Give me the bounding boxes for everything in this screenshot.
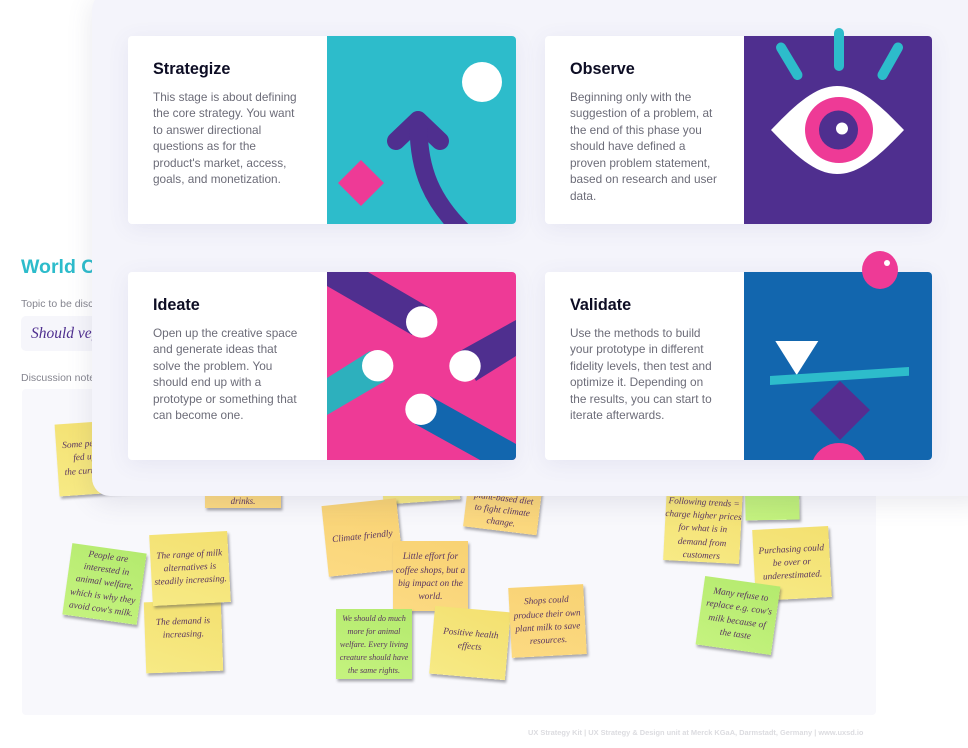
- note: many refuse: Many refuse to: [713, 586, 769, 604]
- note: animal welfare: more for animal: [348, 626, 400, 636]
- note: animal welfare: creature should have: [340, 652, 408, 662]
- note: people are interested: which is why they: [69, 587, 136, 606]
- note: some people: fed up with: [73, 451, 115, 464]
- note: range of milk: [149, 531, 231, 606]
- label: discussion notes: Discussion notes: [21, 372, 100, 384]
- note: purchasing: Purchasing could: [758, 543, 824, 556]
- note: people are interested: avoid cow's milk.: [68, 600, 133, 619]
- note: drinks: [205, 440, 281, 508]
- text: observe: should have defined a: [570, 139, 685, 153]
- note: little effort: [393, 541, 468, 611]
- note: following trends: charge higher prices: [665, 508, 742, 522]
- note: animal welfare: We should do much: [342, 614, 406, 622]
- heading: strategize: Strategize: [153, 60, 230, 78]
- text: ideate: can become one.: [153, 408, 244, 422]
- card: strategize: [128, 36, 516, 224]
- note: shops could produce: produce their own: [513, 607, 581, 620]
- text: ideate: and generate ideas that: [153, 342, 277, 356]
- illustration: connected circles: [327, 272, 516, 460]
- note: shops could produce: plant milk to save: [515, 620, 581, 634]
- note: green hidden: [744, 450, 800, 520]
- text: ideate: [153, 326, 297, 422]
- text: validate: Use the methods to build: [570, 326, 700, 340]
- input: topic: [21, 316, 221, 351]
- text: observe: [570, 90, 717, 203]
- note: some people: Some people are: [62, 437, 124, 451]
- note: range of milk: steadily increasing.: [154, 574, 227, 588]
- label: topic: Topic to be discussed: [21, 298, 121, 310]
- text: validate: the results, you can start to: [570, 392, 712, 406]
- note: animal welfare: the same rights.: [348, 666, 400, 674]
- text: validate: optimize it. Depending on: [570, 375, 703, 389]
- note: many refuse: milk because of: [708, 612, 767, 630]
- heading: observe: Observe: [570, 60, 635, 78]
- text: ideate: prototype or something that: [153, 392, 297, 406]
- note: range of milk: alternatives is: [164, 561, 216, 574]
- note: shops could produce: Shops could: [524, 594, 569, 607]
- note: range of milk: The range of milk: [156, 548, 222, 561]
- note: people are interested: animal welfare,: [75, 574, 134, 592]
- footer credit: UX Strategy Kit | UX Strategy & Design unit at Merck KGaA, Darmstadt, Germany | www.uxsd.io: [528, 728, 863, 737]
- note: purchasing: underestimated.: [763, 570, 823, 583]
- text: observe: the end of this phase you: [570, 123, 702, 137]
- note: many refuse: [696, 576, 780, 655]
- text: strategize: goals, and monetization.: [153, 172, 281, 186]
- note: demand is increasing: The demand is: [156, 616, 210, 628]
- text: strategize: [153, 90, 297, 186]
- note: climate friendly: [321, 498, 404, 577]
- note: climate friendly: Climate friendly: [332, 529, 393, 545]
- note: animal welfare: welfare. Every living: [340, 640, 408, 648]
- note: purchasing: [752, 526, 832, 601]
- note: many refuse: the taste: [719, 627, 751, 642]
- note: animal welfare: [336, 609, 412, 679]
- panel: sticky note board: [22, 389, 876, 715]
- text: ideate: solve the problem. You: [153, 359, 272, 373]
- note: little effort: world.: [418, 592, 442, 602]
- text: strategize: questions as for the: [153, 139, 256, 153]
- illustration: arrow: [327, 36, 516, 224]
- note: people are interested: [62, 543, 147, 625]
- text: validate: [570, 326, 712, 422]
- text: ideate: should end up with a: [153, 375, 261, 389]
- card: ideate: [128, 272, 516, 460]
- note: yellow hidden: [379, 429, 460, 505]
- text: strategize: to answer directional: [153, 123, 261, 137]
- text: strategize: product's market, access,: [153, 156, 286, 170]
- note: following trends: demand from: [678, 535, 727, 548]
- heading: validate: Validate: [570, 296, 631, 314]
- note: demand is increasing: increasing.: [163, 630, 204, 641]
- text: observe: suggestion of a problem, at: [570, 106, 712, 120]
- note: shops could produce: [508, 584, 587, 658]
- note: plant-based diet: change.: [486, 515, 516, 529]
- note: positive health effects: Positive health: [443, 627, 499, 641]
- text: validate: fidelity levels, then test and: [570, 359, 712, 373]
- text: observe: based on research and user: [570, 172, 717, 186]
- note: drinks: drinks.: [231, 496, 255, 506]
- note: following trends: [663, 486, 743, 564]
- card: validate: [545, 272, 932, 460]
- heading: ideate: Ideate: [153, 296, 200, 314]
- note: people are interested: People are: [88, 549, 129, 565]
- note: some people: [55, 420, 133, 496]
- note: little effort: coffee shops, but a: [396, 566, 465, 576]
- note: positive health effects: [429, 606, 511, 680]
- note: purchasing: be over or: [773, 557, 811, 569]
- text: observe: Beginning only with the: [570, 90, 691, 104]
- illustration: eye: [744, 28, 932, 224]
- text: validate: iterate afterwards.: [570, 408, 664, 422]
- note: demand is increasing: [144, 600, 223, 673]
- illustration: balance: [744, 251, 932, 460]
- input: topic: Should vegan milk be offered?: [31, 325, 219, 342]
- text: observe: proven problem statement,: [570, 156, 710, 170]
- note: many refuse: replace e.g. cow's: [706, 599, 772, 618]
- note: some people: the current offer: [64, 464, 125, 478]
- note: shops could produce: resources.: [530, 634, 567, 646]
- note: plant-based diet: plant-based diet: [474, 489, 534, 507]
- note: positive health effects: effects: [457, 641, 482, 653]
- text: strategize: This stage is about defining: [153, 90, 297, 104]
- note: following trends: Following trends =: [668, 495, 740, 509]
- note: little effort: big impact on the: [398, 579, 463, 589]
- text: observe: data.: [570, 189, 596, 203]
- note: plant-based diet: [463, 458, 545, 535]
- heading: World Cafe: World Cafe: [21, 256, 124, 278]
- note: following trends: for what is in: [678, 522, 727, 535]
- panel: four stages: [92, 0, 968, 496]
- text: strategize: the core strategy. You want: [153, 106, 294, 120]
- text: ideate: Open up the creative space: [153, 326, 297, 340]
- note: little effort: Little effort for: [403, 552, 458, 562]
- text: validate: your prototype in different: [570, 342, 704, 356]
- note: following trends: customers: [683, 549, 720, 561]
- note: plant-based diet: to fight climate: [474, 502, 531, 518]
- note: people are interested: interested in: [83, 562, 130, 578]
- card: observe: [545, 36, 932, 224]
